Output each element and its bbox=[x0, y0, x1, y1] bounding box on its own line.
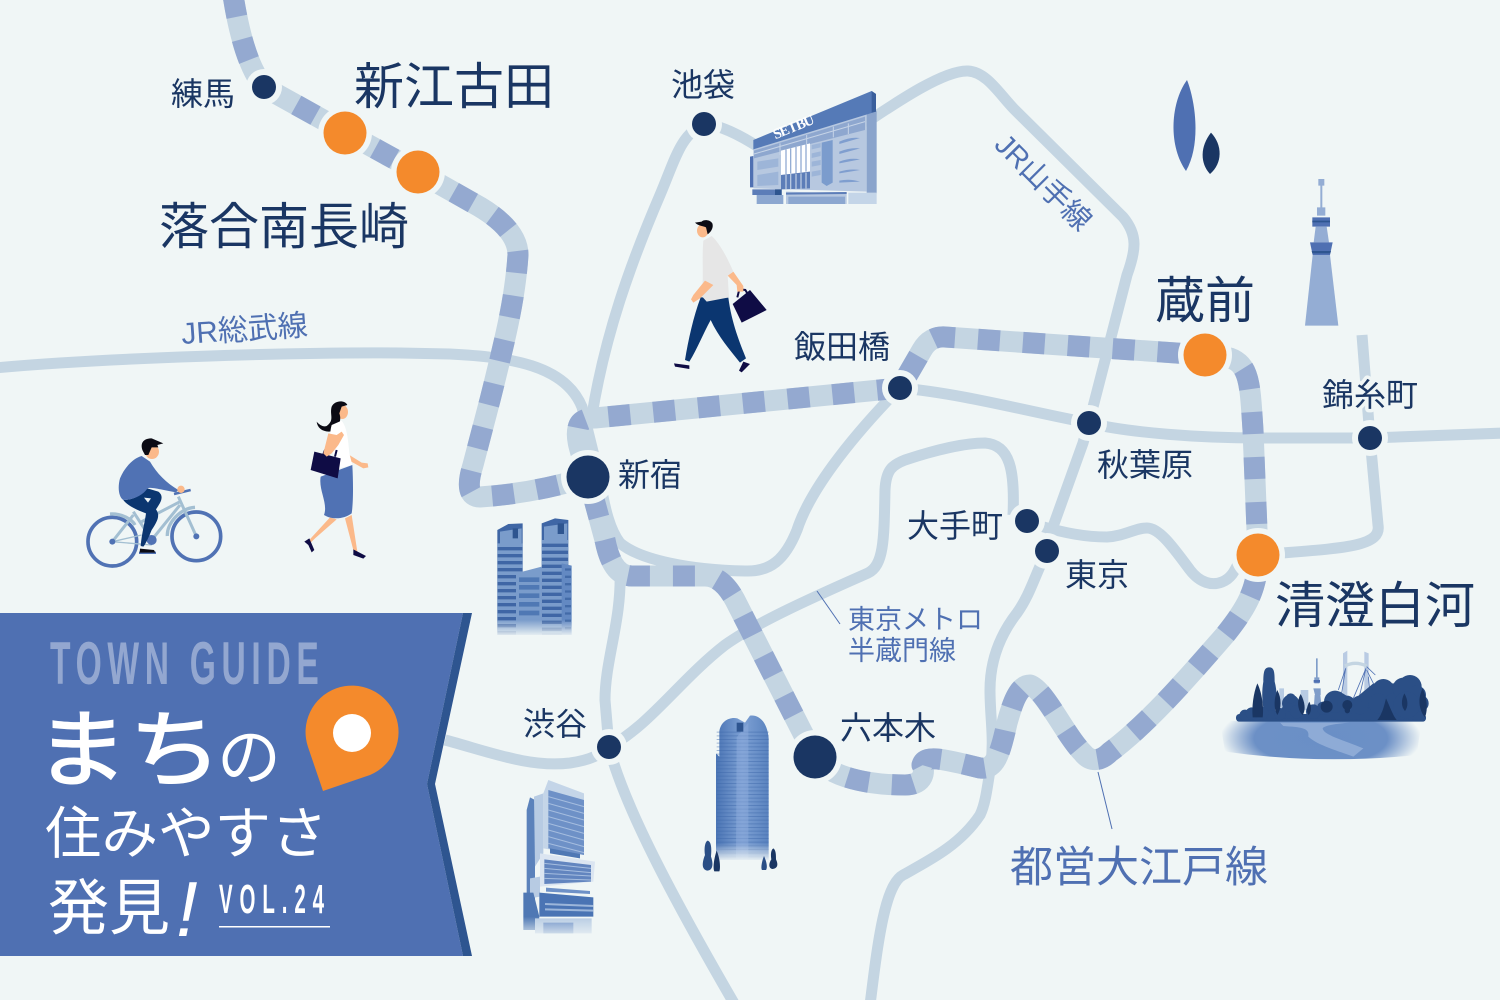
label: 大手町: 大手町 bbox=[907, 508, 1003, 544]
station labels bbox=[159, 59, 1475, 746]
label: 東京メトロ: 東京メトロ bbox=[848, 605, 983, 635]
Oedo line Shinjuku to Roppongi bbox=[577, 388, 900, 477]
line: JR Yamanote line south bbox=[605, 570, 735, 1000]
label: 新江古田: 新江古田 bbox=[354, 59, 554, 115]
line: Hanzomon line east bbox=[1040, 526, 1240, 584]
station: Kiyosumi-shirakawa bbox=[1231, 528, 1285, 582]
illustration: walking man with bag bbox=[674, 220, 767, 372]
label: 練馬: 練馬 bbox=[171, 76, 235, 112]
label: JR山手線: JR山手線 bbox=[988, 128, 1098, 238]
series label: TOWN GUIDE: TOWN GUIDE bbox=[50, 631, 319, 698]
line: JR Yamanote line east bbox=[704, 71, 1134, 1000]
line labels bbox=[180, 128, 1268, 892]
title: まち: まち bbox=[35, 703, 222, 798]
station: Shibuya bbox=[591, 729, 627, 765]
illustration: Tokyo Skytree bbox=[1305, 179, 1338, 326]
station: Roppongi bbox=[788, 730, 842, 784]
icon: map pin bbox=[306, 686, 399, 791]
title: 発見: 発見 bbox=[48, 874, 170, 942]
tree mass bbox=[1236, 667, 1429, 722]
label: 落合南長崎: 落合南長崎 bbox=[159, 199, 409, 255]
leader line: Oedo bbox=[1098, 772, 1112, 829]
Oedo line Kiyosumi-shirakawa to Iidabashi bbox=[900, 337, 1258, 555]
label: 渋谷: 渋谷 bbox=[523, 706, 587, 742]
illustration: Kiyosumi garden skyline bbox=[1222, 650, 1429, 760]
label: 新宿: 新宿 bbox=[618, 457, 682, 493]
illustration: Roppongi Hills tower bbox=[703, 715, 777, 871]
illustration: Seibu department store bbox=[750, 91, 877, 204]
volume number: VOL.24 bbox=[219, 876, 324, 922]
trees at tower base bbox=[703, 841, 712, 871]
label: 飯田橋: 飯田橋 bbox=[794, 329, 890, 365]
label: 六本木: 六本木 bbox=[840, 710, 936, 746]
illustration: Tokyo Metropolitan Government towers bbox=[495, 518, 573, 637]
station: Otemachi bbox=[1009, 503, 1045, 539]
label: 半蔵門線: 半蔵門線 bbox=[848, 636, 956, 666]
volume underline bbox=[219, 926, 330, 928]
station: Ikebukuro bbox=[686, 106, 722, 142]
line: Kinshicho branch bbox=[1258, 335, 1378, 555]
label: 東京: 東京 bbox=[1065, 557, 1129, 593]
label: 錦糸町: 錦糸町 bbox=[1322, 377, 1418, 413]
station: Kuramae bbox=[1178, 328, 1232, 382]
title banner bbox=[0, 613, 472, 956]
label: 秋葉原: 秋葉原 bbox=[1097, 447, 1193, 483]
station: Kinshicho bbox=[1352, 420, 1388, 456]
decorative leaves bbox=[1173, 80, 1220, 174]
station: Nerima bbox=[246, 69, 282, 105]
station: Shinjuku bbox=[561, 450, 615, 504]
title: exclamation mark: ! bbox=[176, 865, 198, 953]
station: Iidabashi bbox=[882, 370, 918, 406]
title: 住みやすさ: 住みやすさ bbox=[45, 802, 328, 865]
station: Tokyo bbox=[1029, 533, 1065, 569]
station markers bbox=[246, 69, 1388, 784]
label: JR総武線: JR総武線 bbox=[180, 309, 309, 351]
illustration: walking woman with bag bbox=[304, 401, 368, 559]
station: Shin-Egota bbox=[318, 106, 372, 160]
label: 清澄白河: 清澄白河 bbox=[1275, 578, 1475, 634]
label: 蔵前: 蔵前 bbox=[1155, 273, 1255, 329]
line: JR Sobu line west and Shinjuku branch bbox=[0, 353, 890, 571]
line: Hanzomon line west bbox=[445, 443, 1013, 764]
Seibu sign: SE I BU bbox=[771, 112, 817, 143]
Oedo line Roppongi to Kiyosumi-shirakawa bbox=[815, 555, 1258, 785]
illustration: Shibuya tower bbox=[520, 780, 595, 940]
line: JR Yamanote line west bbox=[592, 124, 704, 415]
Oedo line north section bbox=[233, 0, 588, 497]
illustration: cyclist bbox=[88, 438, 221, 566]
label: 都営大江戸線: 都営大江戸線 bbox=[1010, 844, 1268, 892]
leader line: Hanzomon bbox=[817, 591, 840, 624]
station: Ochiai-minami-nagasaki bbox=[391, 145, 445, 199]
station: Akihabara bbox=[1071, 405, 1107, 441]
garden pond bbox=[1222, 721, 1420, 760]
Oedo line bbox=[233, 0, 1258, 785]
line: JR Sobu line east bbox=[900, 388, 1500, 438]
title: の: の bbox=[217, 722, 281, 794]
label: 池袋: 池袋 bbox=[671, 67, 735, 103]
